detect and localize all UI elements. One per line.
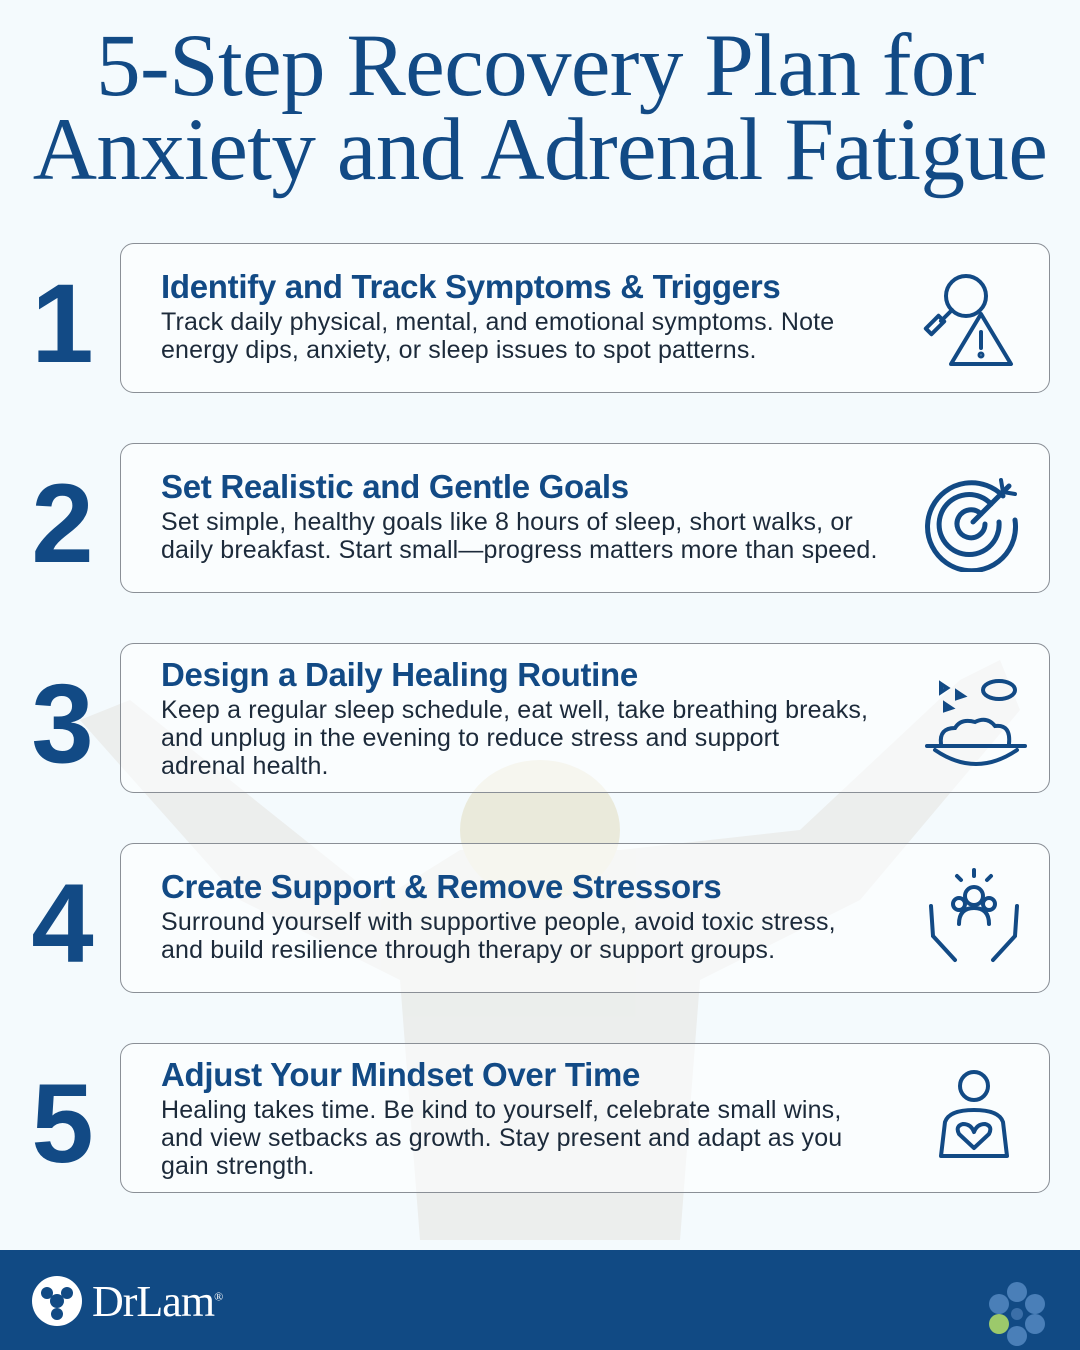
number 4: 4: [31, 861, 94, 986]
card 5: Adjust Your Mindset Over Time: [161, 1056, 640, 1093]
icon: target: [925, 478, 1018, 572]
card 2: [120, 443, 1050, 593]
card 1: Track daily physical, mental, and emotional symptoms. Note: [161, 308, 834, 336]
number 3: 3: [31, 661, 94, 786]
icon: magnifier warning: [924, 274, 1014, 366]
card 4: Create Support & Remove Stressors: [161, 868, 721, 905]
card 5: Healing takes time. Be kind to yourself, celebrate small wins,: [161, 1096, 841, 1124]
card 5: and view setbacks as growth. Stay present and adapt as you: [161, 1124, 842, 1152]
logo: DrLam: [32, 1276, 223, 1326]
card 3: Design a Daily Healing Routine: [161, 656, 638, 693]
number 1: 1: [31, 261, 94, 386]
number 2: 2: [31, 461, 94, 586]
card 2: Set simple, healthy goals like 8 hours of sleep, short walks, or: [161, 508, 853, 536]
logo: flower: [989, 1282, 1045, 1346]
card 5: [120, 1043, 1050, 1193]
footer: [0, 1250, 1080, 1350]
card 4: and build resilience through therapy or support groups.: [161, 936, 775, 964]
card 1: Identify and Track Symptoms & Triggers: [161, 268, 780, 305]
card 3: adrenal health.: [161, 752, 329, 780]
card 1: [120, 243, 1050, 393]
card 3: and unplug in the evening to reduce stress and support: [161, 724, 779, 752]
title: 5-Step Recovery Plan for: [96, 17, 984, 115]
card 1: energy dips, anxiety, or sleep issues to spot patterns.: [161, 336, 757, 364]
card 2: daily breakfast. Start small—progress matters more than speed.: [161, 536, 878, 564]
background figure (faded): [80, 704, 950, 1240]
title: Anxiety and Adrenal Fatigue: [33, 101, 1047, 199]
icon: food bowl: [925, 679, 1027, 766]
logo: DrLam: DrLam®: [92, 1277, 222, 1326]
card 4: [120, 843, 1050, 993]
icon: person with heart: [939, 1070, 1009, 1158]
card 4: Surround yourself with supportive people, avoid toxic stress,: [161, 908, 836, 936]
card 3: [120, 643, 1050, 793]
card 3: Keep a regular sleep schedule, eat well, take breathing breaks,: [161, 696, 868, 724]
card 2: Set Realistic and Gentle Goals: [161, 468, 629, 505]
number 5: 5: [31, 1061, 94, 1186]
title: [33, 17, 1047, 199]
icon: hands with people: [929, 868, 1019, 962]
card 5: gain strength.: [161, 1152, 315, 1180]
